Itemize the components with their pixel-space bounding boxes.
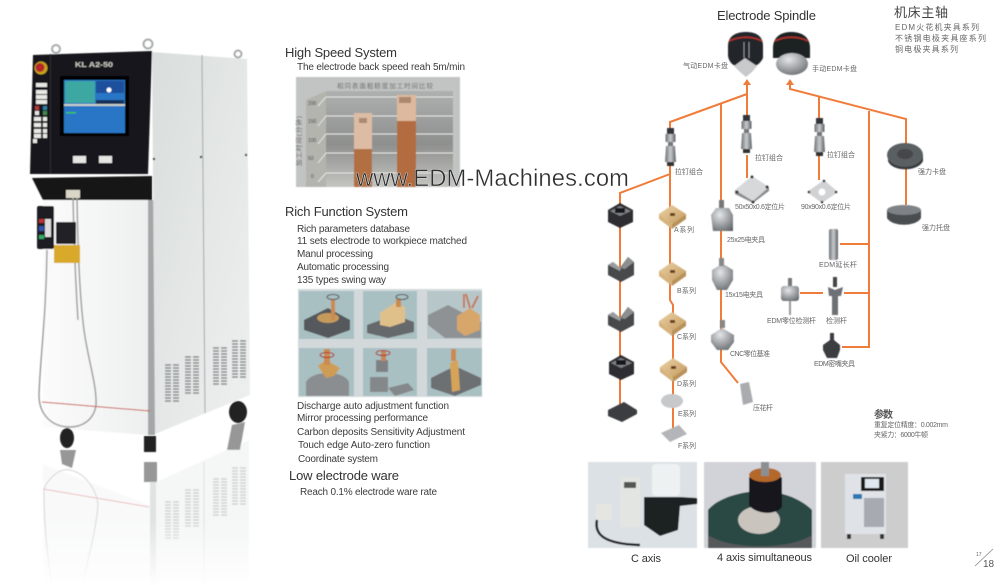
chart axis labels: 200 <box>308 101 317 107</box>
chart axis labels: 100 <box>308 138 317 144</box>
parameters block: 参数 <box>874 408 893 421</box>
part labels: B系列 <box>677 286 696 295</box>
swing modes photo grid <box>298 289 482 397</box>
list: functions top: Rich parameters database <box>297 224 410 235</box>
swing tile 1 <box>299 291 354 339</box>
page number: 18 <box>983 559 995 570</box>
parameters block: 重复定位精度：0.002mm <box>874 420 948 429</box>
part labels <box>674 61 950 450</box>
pull stud 3 <box>814 118 825 156</box>
list: functions bottom <box>297 401 465 465</box>
bar two <box>397 95 416 187</box>
part labels: 强力托盘 <box>922 223 950 232</box>
red stripe <box>42 402 150 411</box>
watermark: www.EDM-Machines.com <box>355 165 629 192</box>
clamp column <box>711 200 753 405</box>
orange connector lines <box>620 79 906 430</box>
list: functions bottom: Carbon deposits Sensitivity Adjustment <box>297 427 465 438</box>
part labels: CNC零位基准 <box>730 349 770 358</box>
part labels: 强力卡盘 <box>918 167 946 176</box>
emergency stop <box>34 62 48 74</box>
list: functions bottom: Coordinate system <box>298 454 378 465</box>
arrowhead: to pneumatic chuck <box>743 79 751 85</box>
photo: oil cooler <box>821 462 908 548</box>
list: functions bottom: Mirror processing performance <box>297 413 428 424</box>
list: functions top: Automatic processing <box>297 262 389 273</box>
heading: high speed system: High Speed System <box>285 45 397 60</box>
pull stud 1 <box>665 128 676 166</box>
vent grilles <box>165 341 246 401</box>
pneumatic chuck <box>728 32 763 77</box>
part labels: C系列 <box>677 332 696 341</box>
part labels: 检测杆 <box>826 316 847 325</box>
socket series column <box>608 203 637 422</box>
list: functions bottom: Discharge auto adjustment function <box>297 401 449 412</box>
model nameplate: KL A2-50 <box>75 62 113 69</box>
list: functions top: Manul processing <box>297 249 373 260</box>
part labels: 90x90x0.6定位片 <box>801 202 851 211</box>
parameters block <box>874 408 948 439</box>
machine floor reflection <box>0 422 270 585</box>
part labels: D系列 <box>677 379 696 388</box>
control screen <box>60 76 129 136</box>
part labels: 50x50x0.6定位片 <box>735 202 785 211</box>
swing tile 2 <box>363 291 417 339</box>
casters <box>60 401 247 452</box>
part labels: A系列 <box>674 225 694 234</box>
photo: C axis <box>588 462 697 548</box>
chart grid lines <box>318 97 453 182</box>
caption: C axis: C axis <box>631 553 662 565</box>
tray <box>32 176 152 200</box>
swing tile 3 <box>427 291 482 339</box>
part labels: 手动EDM卡盘 <box>812 64 857 73</box>
chart axis labels: 150 <box>308 119 317 125</box>
lifting rings <box>52 40 242 58</box>
swing tile 6 <box>427 348 482 396</box>
control panel <box>30 51 152 174</box>
chart axis labels <box>308 101 317 180</box>
heading: rich function system: Rich Function System <box>285 204 408 219</box>
plate 50x50 <box>735 176 769 204</box>
part labels: EDM零位检测杆 <box>767 316 816 325</box>
list: functions top: 11 sets electrode to workpiece matched <box>297 236 467 247</box>
list: functions top <box>297 224 467 286</box>
part labels: EDM延长杆 <box>819 260 857 269</box>
part labels: 气动EDM卡盘 <box>683 61 728 70</box>
chinese title block: 铜电极夹具系列 <box>895 44 958 54</box>
part labels: 拉钉组合 <box>827 150 855 159</box>
chart back wall <box>326 91 453 187</box>
part labels: 15x15电夹具 <box>725 290 763 299</box>
chart axis labels: 0 <box>311 174 314 180</box>
part labels: 压花杆 <box>753 403 773 412</box>
heading: electrode spindle: Electrode Spindle <box>717 8 816 23</box>
chinese title block <box>894 5 986 54</box>
part labels: F系列 <box>678 441 696 450</box>
bar chart photo <box>294 77 460 187</box>
parameters block: 夹紧力：6000牛顿 <box>874 430 928 439</box>
spindle parts <box>608 32 923 442</box>
part labels: 拉钉组合 <box>755 153 783 162</box>
connector <box>66 190 80 198</box>
part labels: EDM密嘴夹具 <box>814 359 855 368</box>
page number: 17 <box>976 552 982 558</box>
machine cabinet <box>30 40 250 452</box>
warning label <box>54 245 80 263</box>
plate 90x90 <box>807 180 838 203</box>
strong chuck <box>887 143 923 169</box>
chart axis labels: 50 <box>308 156 314 162</box>
cabinet doors <box>152 52 250 434</box>
pendant controller <box>37 206 54 249</box>
brass series column <box>659 205 687 442</box>
chart title: 相同表面粗糙度加工时间比较 <box>337 81 434 90</box>
machine corner post <box>148 200 155 435</box>
caption: oil cooler: Oil cooler <box>846 553 892 565</box>
cables <box>39 198 96 427</box>
meters <box>73 156 112 163</box>
arrowhead: to manual chuck <box>786 79 794 85</box>
manual chuck <box>773 32 810 75</box>
photo: 4 axis simultaneous <box>704 462 816 548</box>
text: high speed detail: The electrode back speed reah 5m/min <box>297 62 465 73</box>
pull stud 2 <box>741 115 752 153</box>
chinese title block: 机床主轴 <box>894 5 948 20</box>
panel buttons <box>33 83 47 143</box>
machine side panel <box>43 200 148 435</box>
text: low ware detail: Reach 0.1% electrode ware rate <box>300 487 437 498</box>
page number <box>975 549 995 570</box>
tool cluster right <box>781 229 843 358</box>
swing tile 5 <box>363 348 417 396</box>
list: functions top: 135 types swing way <box>297 275 386 286</box>
part labels: E系列 <box>678 409 696 418</box>
strong pallet <box>887 205 921 225</box>
chinese title block: EDM火花机夹具系列 <box>895 22 979 32</box>
caption: 4 axis simultaneous: 4 axis simultaneous <box>717 552 812 564</box>
rotary switch <box>56 222 76 244</box>
heading: low electrode ware: Low electrode ware <box>289 468 399 483</box>
list: functions bottom: Touch edge Auto-zero function <box>298 440 430 451</box>
chart y-axis title: 加工时间(分钟) <box>294 116 303 166</box>
part labels: 25x25电夹具 <box>727 235 765 244</box>
bar one <box>354 113 372 187</box>
part labels: 拉钉组合 <box>675 167 703 176</box>
chinese title block: 不锈钢电极夹具座系列 <box>895 33 986 43</box>
swing tile 4 <box>299 348 354 396</box>
